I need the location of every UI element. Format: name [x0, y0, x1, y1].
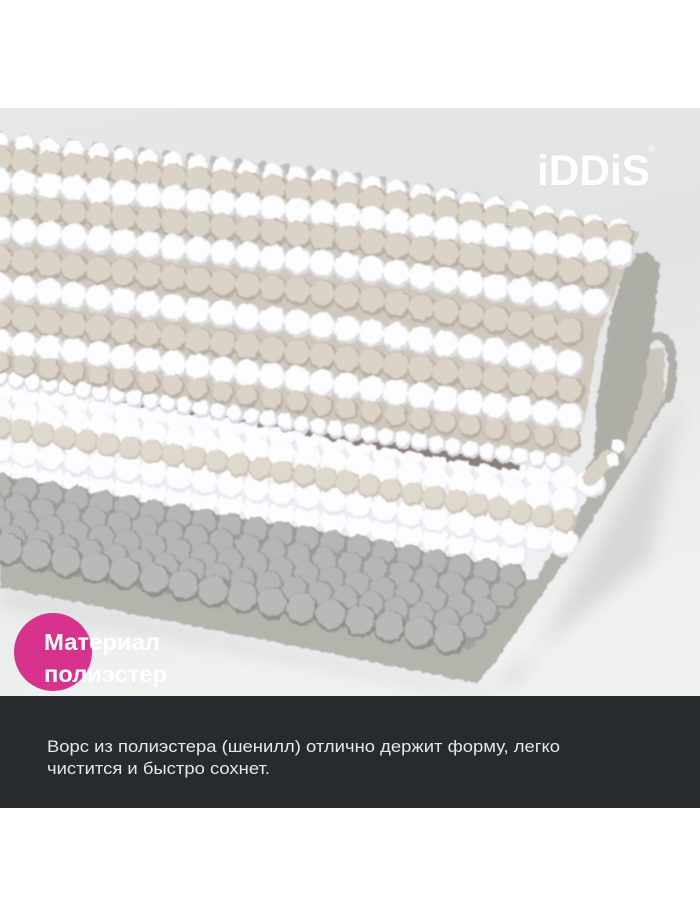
- upper beige row 1: [0, 158, 633, 240]
- lower beige row: [0, 426, 577, 523]
- upper beige row 3: [0, 258, 590, 335]
- grey front row: [7, 548, 465, 642]
- lower mat stripes: [0, 385, 618, 580]
- upper beige row 4: [0, 316, 582, 392]
- right tail beige: [590, 458, 608, 478]
- photo backdrop: [0, 108, 700, 696]
- grey row 2: [0, 502, 515, 598]
- dark description panel: [0, 696, 700, 808]
- description line 1: Ворс из полиэстера (шенилл) отлично держит форму, легко: [47, 738, 560, 756]
- grey row 1: [0, 486, 525, 580]
- grey row 4: [0, 532, 485, 630]
- lower white row 4: [0, 448, 565, 543]
- panel background: [0, 696, 700, 808]
- upper white row 3: [0, 228, 606, 304]
- upper white row 5: [0, 342, 578, 418]
- grey row 3: [0, 518, 502, 615]
- photo: rolled bath mat: [0, 136, 673, 683]
- badge line 2: полиэстер: [44, 661, 167, 687]
- grey block base: [0, 477, 525, 650]
- shadow gap under roll: [120, 398, 520, 467]
- upper white row 4: [0, 286, 580, 365]
- upper beige row 2: [0, 206, 612, 277]
- upper white row 2: [0, 180, 625, 255]
- lower white row 1: [0, 392, 600, 485]
- upper roll stripes: [0, 136, 643, 462]
- logo wordmark: iDDiS: [537, 147, 650, 195]
- description line 2: чистится и быстро сохнет.: [47, 760, 270, 778]
- fold inner: [612, 348, 664, 460]
- grey backing edge: [0, 380, 668, 683]
- backing fold loop: [640, 337, 673, 402]
- lower white row 5: [0, 468, 535, 560]
- upper white row 6: [0, 376, 556, 462]
- upper roll base: [0, 140, 640, 458]
- grey stripe block: [0, 477, 525, 650]
- lower mat base: [0, 385, 600, 580]
- pink circle: [14, 613, 92, 691]
- upper beige row 5: [0, 362, 578, 442]
- grey peek row: [0, 136, 640, 226]
- mat shadow: [0, 400, 680, 696]
- brand logo: [537, 144, 655, 195]
- registered mark: ®: [648, 144, 655, 154]
- upper white row 1: [0, 142, 643, 233]
- badge line 1: Материал: [44, 629, 160, 655]
- lower white row 2: [0, 410, 590, 505]
- right tail white: [612, 446, 618, 462]
- roll side panel: [594, 252, 660, 468]
- badge: material: [14, 613, 167, 691]
